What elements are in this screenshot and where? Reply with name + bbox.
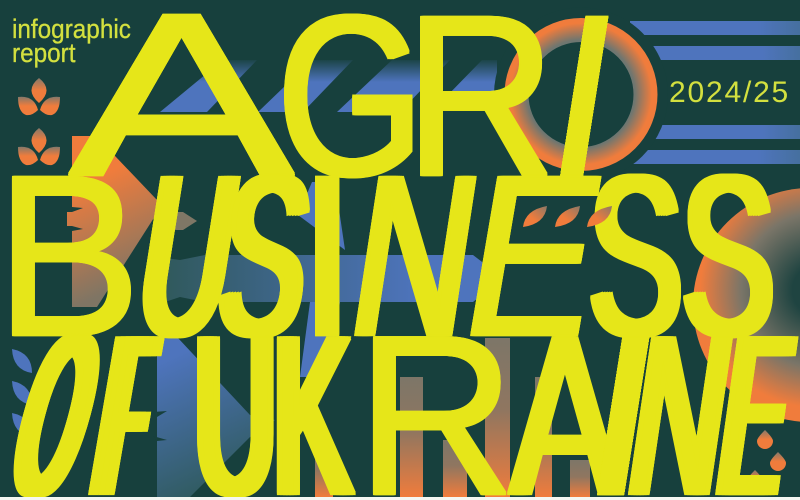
title line: BUSINESS: U: [124, 129, 252, 386]
icon: orange drops: [747, 430, 786, 489]
title line: OF UKRAINE: [0, 290, 800, 497]
title line: BUSINESS: E: [449, 129, 619, 386]
icon: blue leaves: [12, 349, 32, 437]
orange bars: [315, 338, 590, 497]
title line: BUSINESS: S: [589, 129, 683, 386]
icon: wheat sprout 1: [18, 78, 60, 115]
subtitle: infographic report: infographic report: [12, 14, 131, 68]
icon: wheat sprout 2: [18, 128, 60, 165]
blue small wedge: [298, 182, 345, 377]
title line: BUSINESS: [0, 129, 774, 497]
title line: BUSINESS: N: [337, 129, 493, 386]
sun circle: [693, 188, 800, 422]
icon: orange leaves: [523, 206, 612, 227]
orange ring: [494, 8, 668, 182]
title line: AGRI: [65, 0, 639, 228]
blue horizontal stripes: [630, 21, 800, 164]
blue slanted bands: [160, 60, 497, 112]
title line: BUSINESS: I: [291, 129, 363, 386]
date label: 2024/25: 2024/25: [669, 76, 790, 109]
blue middle arrow band: [165, 255, 503, 302]
orange arrow: [67, 136, 197, 307]
title line: BUSINESS: S: [682, 129, 774, 386]
title line: BUSINESS: S: [208, 129, 321, 386]
blue lower arrow: [153, 338, 275, 497]
